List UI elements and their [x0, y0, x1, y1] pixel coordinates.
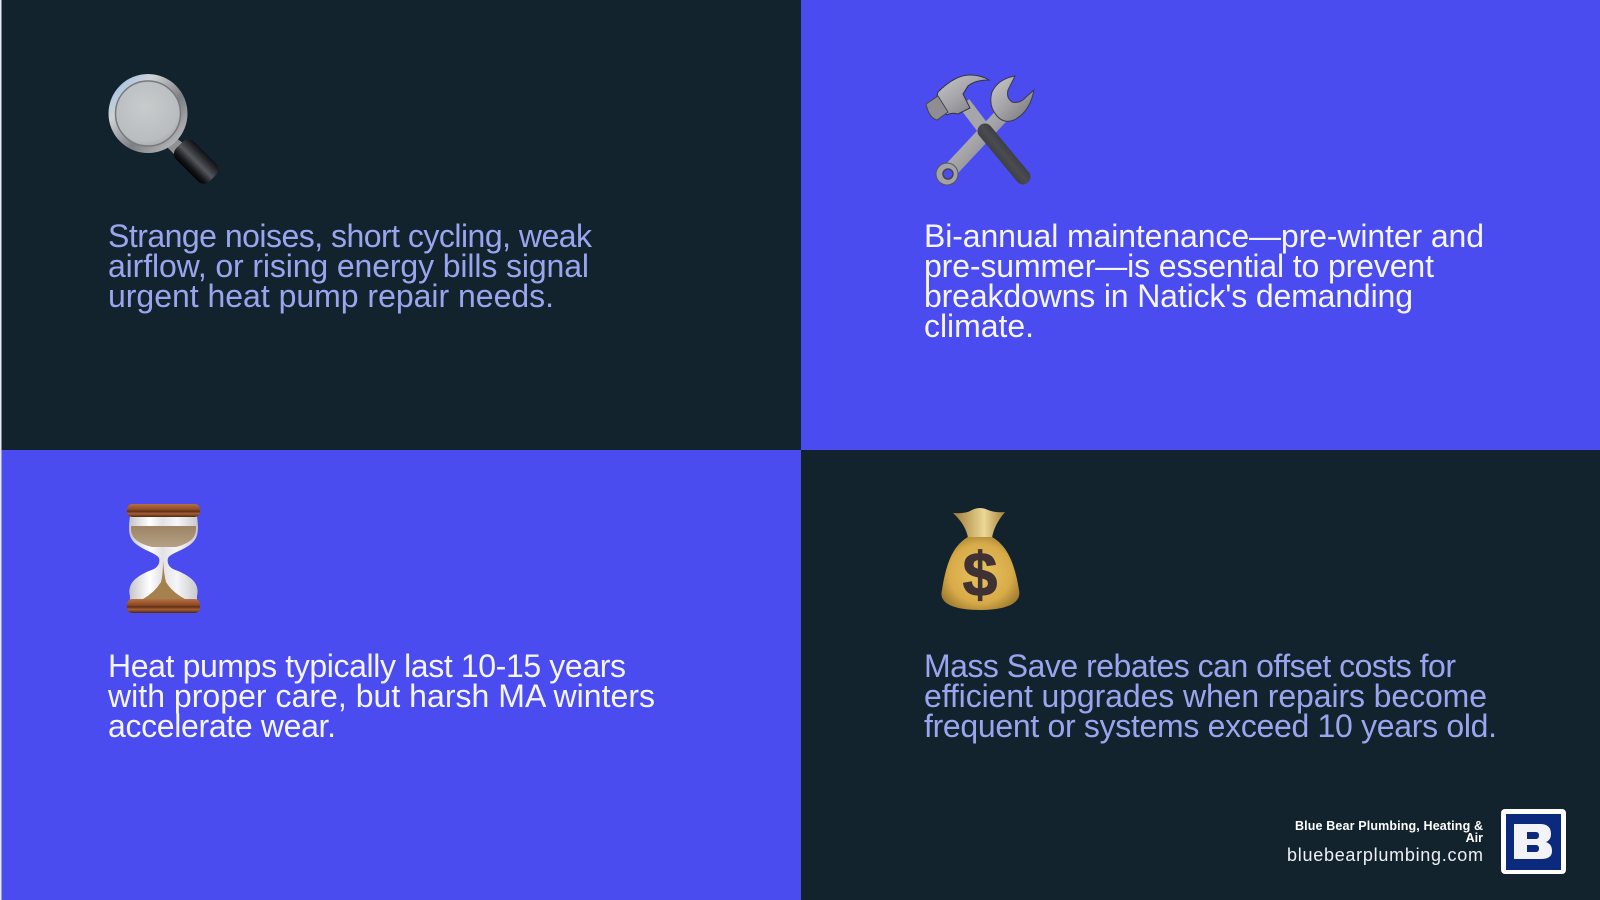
text: lifespan: accelerate wear.: [108, 708, 336, 744]
text: maintenance: breakdowns in Natick's demanding: [924, 278, 1413, 314]
brand website: bluebearplumbing.com: [1287, 845, 1483, 865]
text: maintenance: Bi-annual maintenance—pre-winter and: [924, 218, 1484, 254]
panel: lifespan: [0, 450, 801, 900]
text: maintenance: pre-summer—is essential to prevent: [924, 248, 1434, 284]
brand name: [1295, 819, 1483, 845]
text: lifespan: with proper care, but harsh MA winters: [107, 678, 655, 714]
icon: magnifying glass: [108, 74, 222, 187]
icon: money bag: $: [963, 541, 997, 610]
text: lifespan: [107, 648, 655, 744]
text: maintenance: climate.: [924, 308, 1034, 344]
brand name: Air: [1466, 831, 1483, 845]
brand name: Blue Bear Plumbing, Heating &: [1295, 819, 1483, 833]
panel: warning signs: [0, 0, 801, 450]
text: warning signs: urgent heat pump repair needs.: [108, 278, 554, 314]
text: rebates: frequent or systems exceed 10 years old.: [924, 708, 1497, 744]
text: lifespan: Heat pumps typically last 10-15 years: [108, 648, 626, 684]
text: maintenance: [924, 218, 1484, 344]
left edge strip: [0, 0, 2, 900]
icon: hammer and wrench: [926, 75, 1034, 185]
text: warning signs: Strange noises, short cycling, weak: [108, 218, 593, 254]
text: warning signs: airflow, or rising energy bills signal: [108, 248, 589, 284]
panel: rebates: [801, 450, 1600, 900]
text: rebates: efficient upgrades when repairs become: [924, 678, 1487, 714]
text: rebates: Mass Save rebates can offset costs for: [924, 648, 1456, 684]
panel: maintenance: [801, 0, 1600, 450]
icon: hourglass: [127, 504, 200, 613]
icon: money bag: [941, 508, 1019, 610]
logo: [1501, 809, 1566, 874]
text: warning signs: [108, 218, 593, 314]
text: rebates: [924, 648, 1497, 744]
brand footer: [1287, 809, 1566, 874]
